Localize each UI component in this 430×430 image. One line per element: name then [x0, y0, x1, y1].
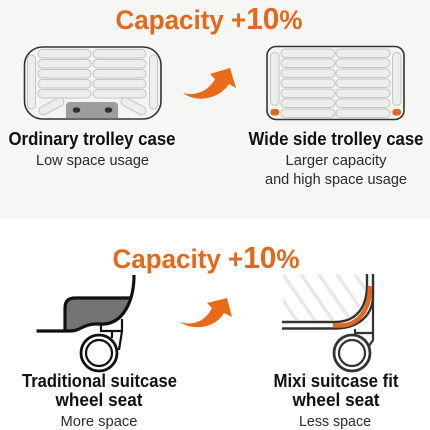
- text: less space: Less space: [299, 413, 371, 430]
- label: traditional suitcase wheel seat: [22, 370, 177, 410]
- text: low space usage: Low space usage: [36, 152, 149, 169]
- text: larger capacity and high space usage: and high space usage: [265, 171, 407, 188]
- panel: capacity comparison of trolley cases: [0, 0, 430, 218]
- label: traditional suitcase wheel seat: Traditional suitcase: [22, 370, 177, 391]
- icon: wide side trolley case: [267, 46, 404, 120]
- label: mixi suitcase fit wheel seat: Mixi suitcase fit: [274, 370, 398, 391]
- label: mixi suitcase fit wheel seat: [274, 370, 398, 410]
- text: larger capacity and high space usage: [265, 152, 407, 188]
- icon: mixi wheel seat: [282, 274, 374, 372]
- label: traditional suitcase wheel seat: wheel seat: [55, 389, 142, 410]
- text: more space: More space: [60, 413, 138, 430]
- icon: ordinary trolley case: [24, 47, 161, 119]
- arrow: bottom: [180, 298, 232, 327]
- title: capacity bottom: Capacity +10%: [112, 240, 300, 275]
- title: capacity top: Capacity +10%: [116, 1, 302, 36]
- label: mixi suitcase fit wheel seat: wheel seat: [292, 389, 380, 410]
- arrow: top: [183, 68, 236, 99]
- icon: traditional wheel seat: [36, 275, 134, 371]
- text: larger capacity and high space usage: Larger capacity: [286, 152, 387, 169]
- label: ordinary trolley case: Ordinary trolley case: [8, 128, 176, 149]
